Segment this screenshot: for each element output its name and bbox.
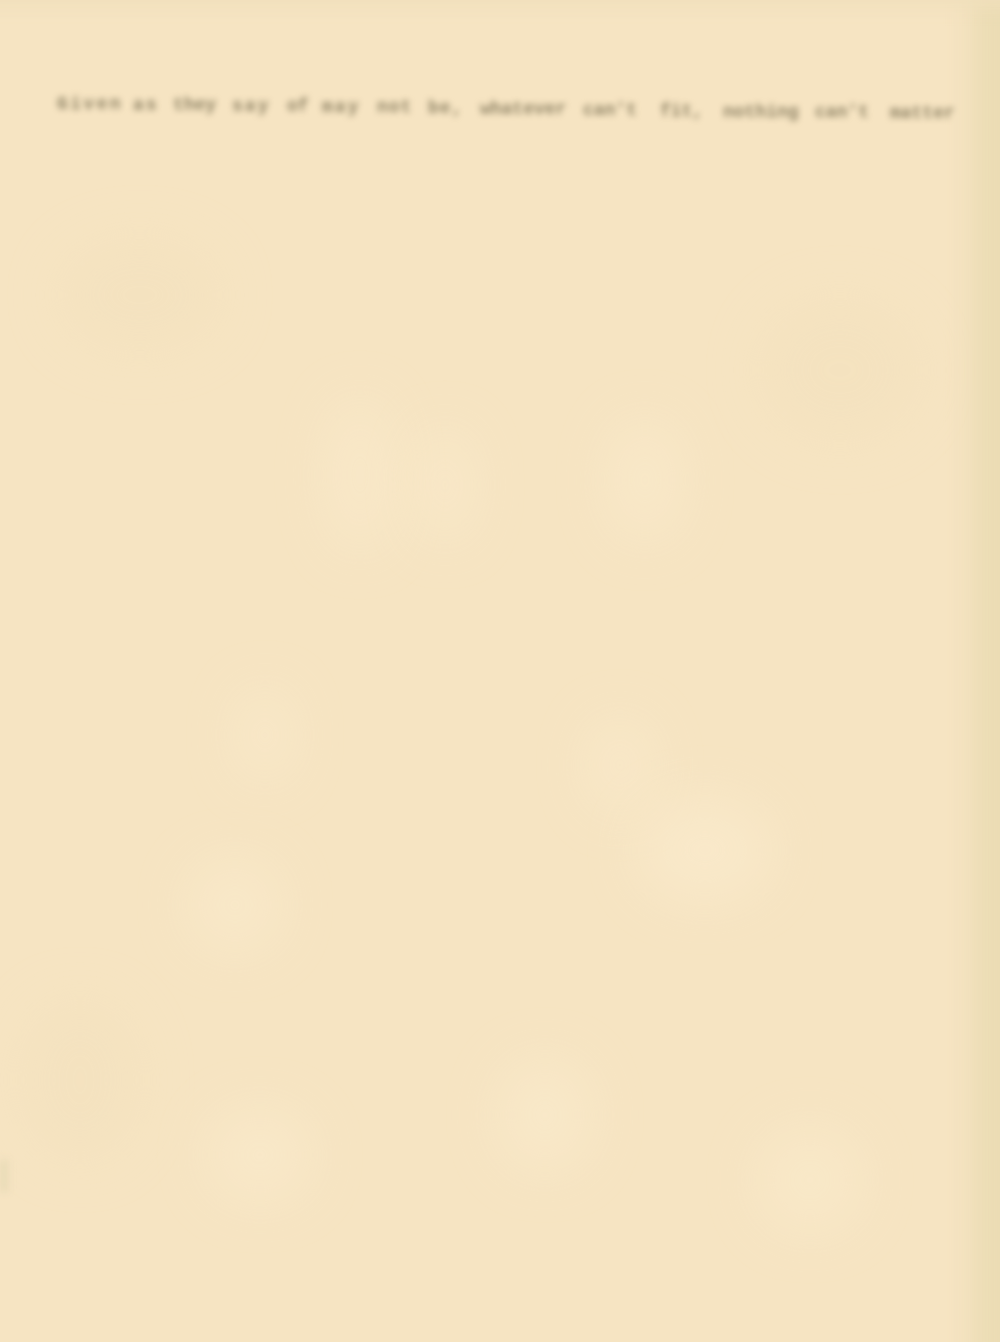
text block: blurred typed line: nothing bbox=[723, 103, 799, 123]
right edge discoloured band bbox=[972, 0, 1000, 1342]
text block: blurred typed line: whatever bbox=[480, 100, 566, 120]
left edge mark bbox=[0, 1160, 8, 1192]
text block: blurred typed line: can't bbox=[815, 103, 869, 123]
text block: blurred typed line: as bbox=[133, 96, 159, 116]
text block: blurred typed line: they bbox=[173, 96, 216, 116]
text block: blurred typed line: not bbox=[377, 98, 412, 118]
text block: blurred typed line: Given bbox=[57, 95, 123, 115]
text block: blurred typed line: say bbox=[232, 97, 270, 117]
text block: blurred typed line: can't bbox=[583, 101, 637, 121]
text block: blurred typed line: matter bbox=[890, 104, 955, 124]
top edge shading bbox=[0, 0, 1000, 6]
text block: blurred typed line bbox=[54, 94, 956, 124]
text block: blurred typed line: may bbox=[322, 98, 360, 118]
text block: blurred typed line: of bbox=[287, 97, 309, 117]
text block: blurred typed line: fit, bbox=[660, 102, 703, 122]
text block: blurred typed line: be, bbox=[428, 99, 463, 119]
